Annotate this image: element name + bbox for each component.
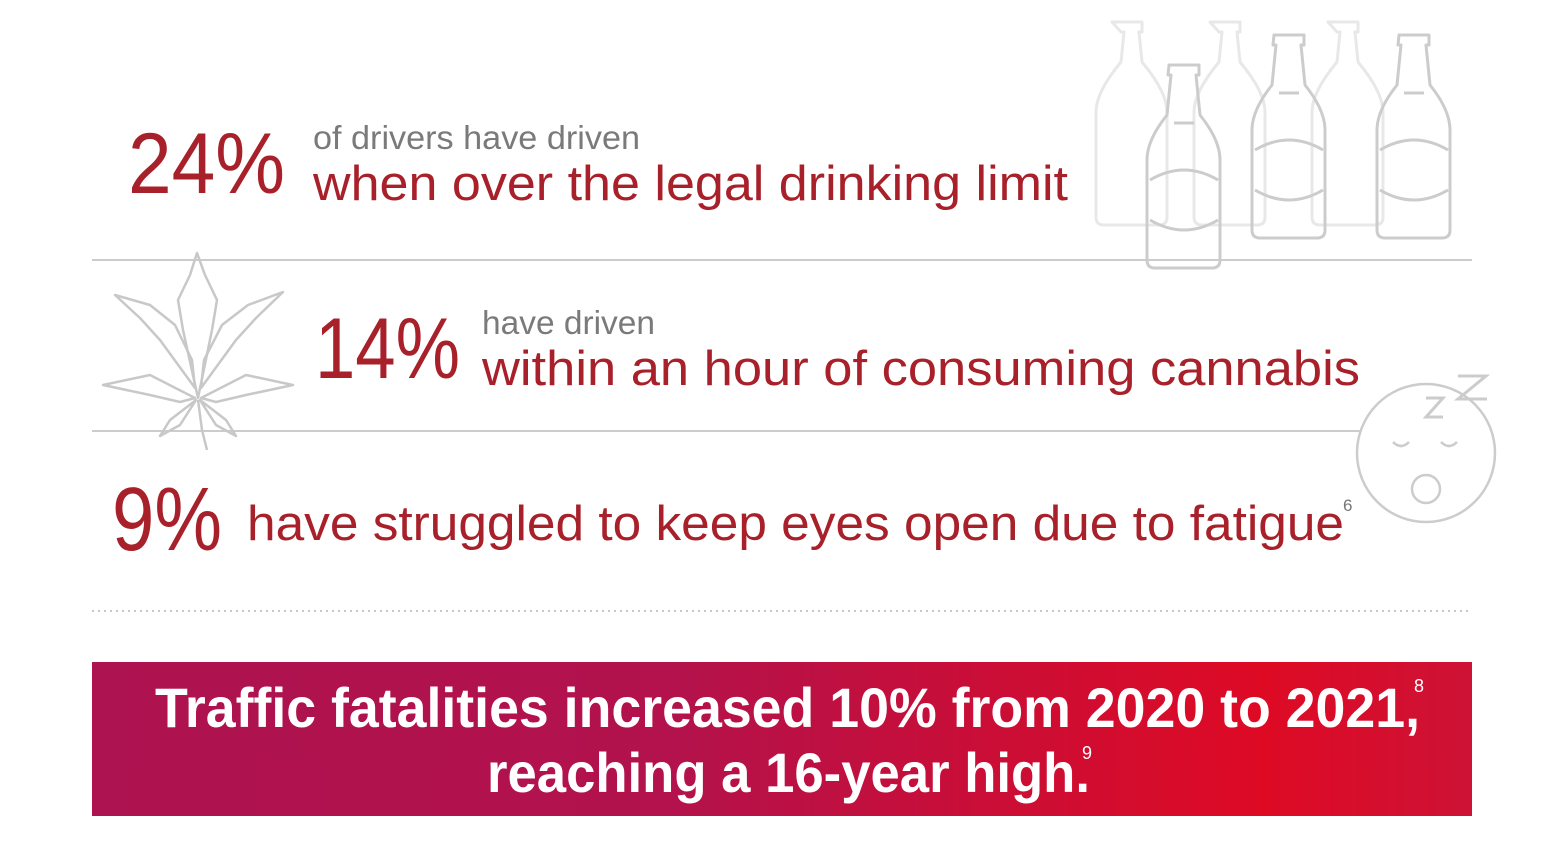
banner	[92, 662, 1472, 816]
divider lines	[92, 260, 1472, 431]
stat: 9%	[112, 470, 1352, 570]
icon: bottles	[1096, 22, 1450, 268]
stat: 24%: 24%	[128, 116, 285, 212]
icon: sleepy face	[1357, 376, 1495, 522]
stat: 24%: when over the legal drinking limit	[312, 157, 1068, 211]
icon: cannabis leaf	[103, 253, 293, 450]
stat: 14%	[315, 301, 1360, 397]
stat: 14%: 14%	[315, 301, 460, 397]
stat: 9%: 6	[1343, 496, 1352, 515]
banner: 9	[1082, 743, 1092, 763]
banner: Traffic fatalities increased 10% from 2020 to 2021,	[155, 676, 1420, 739]
stat: 14%: within an hour of consuming cannabis	[481, 342, 1360, 396]
stat: 14%: have driven	[482, 304, 655, 341]
stat: 9%: 9%	[112, 470, 222, 570]
stat: 24%: of drivers have driven	[313, 119, 640, 156]
stat: 24%	[128, 116, 1068, 212]
stat: 9%: have struggled to keep eyes open due to fatigue	[247, 497, 1344, 551]
banner: 8	[1414, 676, 1424, 696]
banner: reaching a 16-year high.	[487, 741, 1090, 804]
